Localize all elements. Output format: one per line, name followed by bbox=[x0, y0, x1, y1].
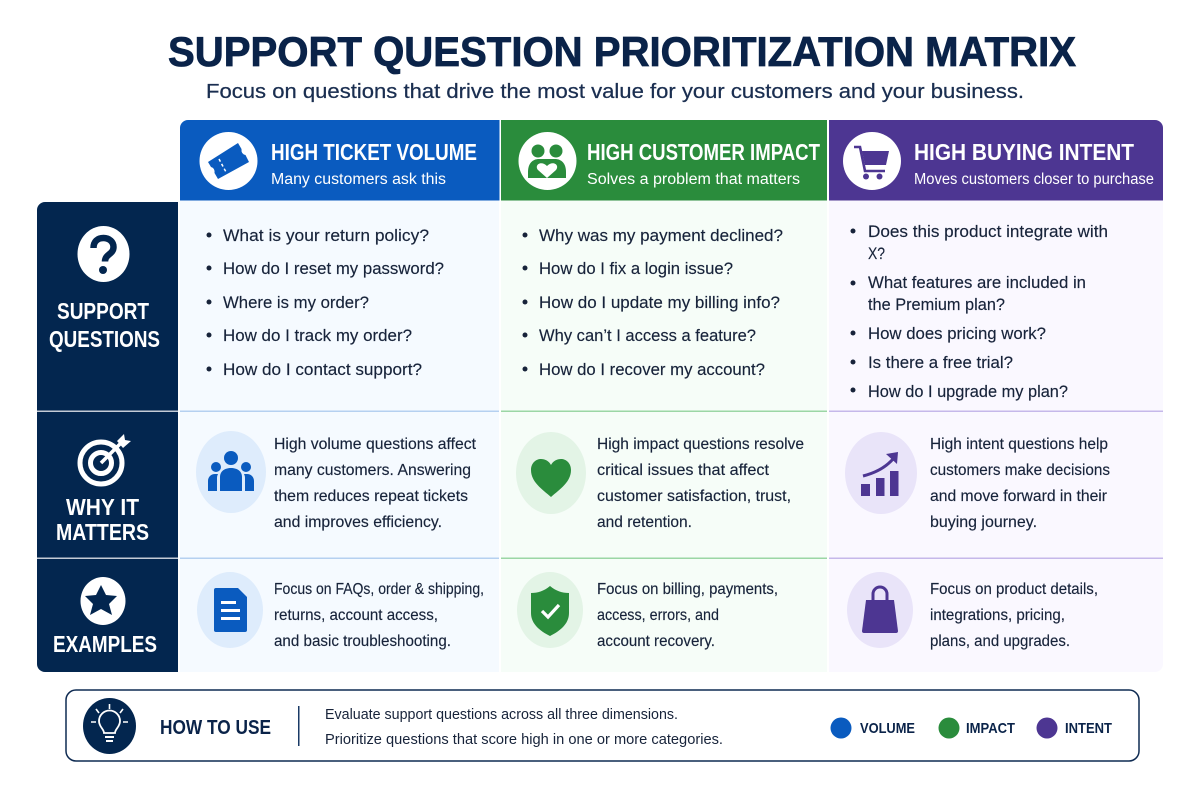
text: intent examples: integrations, pricing, bbox=[930, 607, 1065, 624]
legend bbox=[830, 718, 1112, 738]
list: intent questions: How does pricing work? bbox=[868, 324, 1046, 343]
list: impact questions: How do I recover my account? bbox=[539, 360, 765, 379]
panel: high buying intent column bbox=[829, 120, 1163, 672]
list: impact questions: How do I update my billing info? bbox=[539, 293, 780, 312]
text: instructions: Prioritize questions that score high in one or more categories. bbox=[325, 732, 723, 748]
icon: target with arrow bbox=[80, 434, 131, 484]
icon: question mark bbox=[78, 226, 130, 282]
legend: INTENT bbox=[1065, 720, 1112, 737]
text: impact examples: access, errors, and bbox=[597, 607, 719, 624]
text: intent examples: plans, and upgrades. bbox=[930, 633, 1070, 650]
text: impact examples: account recovery. bbox=[597, 633, 715, 650]
header: high ticket volume: Many customers ask this bbox=[271, 171, 446, 188]
header: high buying intent bbox=[829, 120, 1163, 200]
text: why intent matters: High intent questions help bbox=[930, 436, 1108, 453]
text: why impact matters: critical issues that affect bbox=[597, 462, 770, 479]
list: intent questions: the Premium plan? bbox=[868, 295, 1005, 314]
list: volume questions: How do I reset my password? bbox=[223, 259, 444, 278]
panel: high customer impact column bbox=[501, 120, 827, 672]
text: why volume matters: and improves efficiency. bbox=[274, 514, 442, 531]
list: volume questions: What is your return policy? bbox=[223, 226, 429, 245]
text: why intent matters bbox=[930, 436, 1110, 531]
header: high buying intent: HIGH BUYING INTENT bbox=[914, 139, 1134, 165]
text: intent examples: Focus on product details, bbox=[930, 581, 1098, 598]
text: why volume matters: them reduces repeat tickets bbox=[274, 488, 468, 505]
icon: shield with check bbox=[517, 572, 583, 648]
list: volume questions: How do I contact support? bbox=[223, 360, 422, 379]
icon: document bbox=[197, 572, 263, 648]
list: intent questions: X? bbox=[868, 244, 885, 263]
label: why it matters: MATTERS bbox=[56, 519, 149, 545]
panel: row labels bbox=[37, 202, 178, 672]
text: why impact matters bbox=[597, 436, 804, 531]
label: support questions bbox=[49, 298, 160, 352]
legend: IMPACT bbox=[966, 720, 1015, 737]
icon: ticket bbox=[200, 132, 258, 190]
icon: rising bar chart bbox=[845, 432, 917, 514]
text: instructions: Evaluate support questions across all three dimensions. bbox=[325, 707, 678, 723]
panel: high ticket volume column bbox=[180, 120, 500, 672]
list: volume questions: How do I track my order? bbox=[223, 326, 412, 345]
label: support questions: QUESTIONS bbox=[49, 326, 160, 352]
text: volume examples bbox=[274, 581, 484, 650]
icon: light bulb bbox=[83, 698, 136, 754]
icon: shopping cart bbox=[843, 132, 901, 190]
label: support questions: SUPPORT bbox=[57, 298, 149, 324]
list: impact questions: How do I fix a login issue? bbox=[539, 259, 733, 278]
list: intent questions: Is there a free trial? bbox=[868, 353, 1013, 372]
text: why impact matters: High impact questions resolve bbox=[597, 436, 804, 453]
header: high ticket volume bbox=[180, 120, 500, 200]
list: intent questions: What features are included in bbox=[868, 273, 1086, 292]
header: high customer impact: HIGH CUSTOMER IMPACT bbox=[587, 139, 820, 165]
list: impact questions bbox=[522, 226, 783, 379]
text: why volume matters bbox=[274, 436, 477, 531]
title: SUPPORT QUESTION PRIORITIZATION MATRIX bbox=[168, 28, 1076, 75]
text: volume examples: Focus on FAQs, order & shipping, bbox=[274, 581, 484, 598]
icon: shopping bag bbox=[847, 572, 913, 648]
text: why volume matters: High volume questions affect bbox=[274, 436, 477, 453]
text: impact examples: Focus on billing, payments, bbox=[597, 581, 778, 598]
list: intent questions bbox=[850, 222, 1108, 401]
text: volume examples: and basic troubleshooting. bbox=[274, 633, 451, 650]
list: volume questions: Where is my order? bbox=[223, 293, 369, 312]
list: impact questions: Why can’t I access a feature? bbox=[539, 326, 756, 345]
text: why intent matters: buying journey. bbox=[930, 514, 1037, 531]
label: examples: EXAMPLES bbox=[53, 631, 157, 657]
list: intent questions: How do I upgrade my plan? bbox=[868, 382, 1068, 401]
label: why it matters bbox=[56, 494, 149, 545]
text: why intent matters: customers make decisions bbox=[930, 462, 1110, 479]
panel: how to use bbox=[66, 690, 1139, 761]
list: intent questions: Does this product integrate with bbox=[868, 222, 1108, 241]
icon: people group bbox=[196, 431, 266, 513]
text: why impact matters: customer satisfaction, trust, bbox=[597, 488, 791, 505]
text: why impact matters: and retention. bbox=[597, 514, 692, 531]
legend: VOLUME bbox=[860, 720, 915, 737]
list: impact questions: Why was my payment declined? bbox=[539, 226, 783, 245]
subtitle: Focus on questions that drive the most value for your customers and your business. bbox=[206, 80, 1024, 103]
list: volume questions bbox=[206, 226, 444, 379]
text: impact examples bbox=[597, 581, 778, 650]
label: why it matters: WHY IT bbox=[66, 494, 139, 520]
text: instructions bbox=[325, 707, 723, 748]
header: high buying intent: Moves customers closer to purchase bbox=[914, 171, 1154, 188]
icon: star bbox=[80, 577, 126, 625]
text: why volume matters: many customers. Answering bbox=[274, 462, 471, 479]
text: intent examples bbox=[930, 581, 1098, 650]
text: why intent matters: and move forward in their bbox=[930, 488, 1108, 505]
text: volume examples: returns, account access, bbox=[274, 607, 438, 624]
header: high customer impact bbox=[501, 120, 827, 200]
heading: how to use: HOW TO USE bbox=[160, 717, 271, 739]
header: high customer impact: Solves a problem that matters bbox=[587, 171, 800, 188]
icon: people with heart bbox=[518, 132, 576, 190]
header: high ticket volume: HIGH TICKET VOLUME bbox=[271, 139, 477, 165]
icon: heart bbox=[516, 432, 586, 514]
